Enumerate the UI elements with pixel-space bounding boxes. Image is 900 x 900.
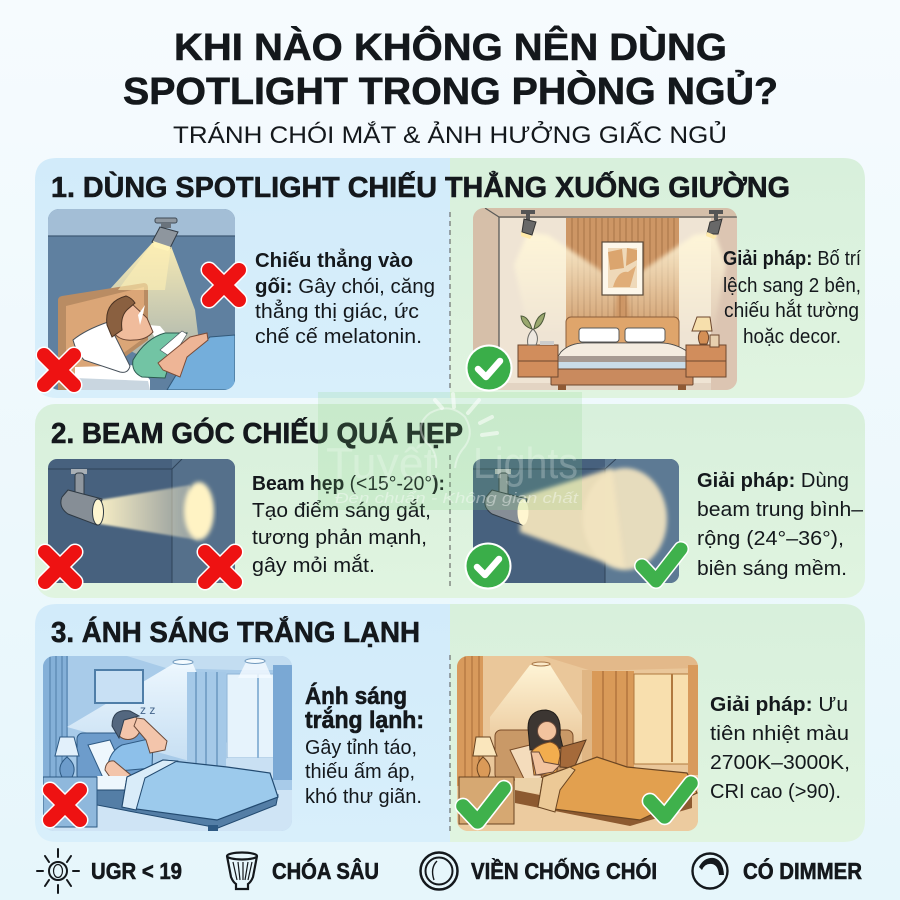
title: [123, 24, 778, 113]
solution text 1: Giải pháp: Bố trí: [723, 248, 861, 270]
watermark: Đèn chuẩn - Không gian chất: [335, 490, 579, 507]
heading 3: 3. ÁNH SÁNG TRẮNG LẠNH: [51, 615, 420, 649]
solution text 1: [723, 248, 861, 348]
illustration: narrow beam: [48, 459, 235, 583]
label: deep reflector: CHÓA SÂU: [272, 857, 379, 884]
problem text 1: chế cế melatonin.: [255, 326, 422, 348]
illustration: wide soft beam: [473, 459, 679, 583]
problem text 2: tương phản mạnh,: [252, 527, 427, 549]
icon: deep reflector: [227, 852, 257, 889]
problem text 3: Ánh sáng: [305, 682, 407, 710]
label: dimmer: CÓ DIMMER: [743, 857, 862, 884]
panel 2: beam too narrow: [35, 404, 865, 598]
panel 1: spotlight straight down: [35, 158, 865, 398]
solution text 1: hoặc decor.: [743, 326, 841, 348]
problem text 3: trắng lạnh:: [305, 706, 424, 734]
heading 1: 1. DÙNG SPOTLIGHT CHIẾU THẲNG XUỐNG GIƯỜNG: [51, 170, 790, 204]
icon: UGR glare sun: [37, 849, 79, 893]
solution text 1: lệch sang 2 bên,: [723, 275, 861, 297]
title: SPOTLIGHT TRONG PHÒNG NGỦ?: [123, 69, 778, 113]
solution text 3: CRI cao (>90).: [710, 781, 841, 803]
panel 3: cold white light: [35, 604, 865, 842]
problem text 2: Tạo điểm sáng gắt,: [252, 499, 431, 522]
red x badge: right: [209, 270, 239, 300]
problem text 3: Gây tỉnh táo,: [305, 737, 417, 759]
solution text 2: [697, 470, 864, 580]
problem text 1: [255, 248, 435, 348]
subtitle: TRÁNH CHÓI MẮT & ẢNH HƯỞNG GIẤC NGỦ: [173, 120, 727, 149]
zzz label: z z: [140, 703, 155, 717]
solution text 3: Giải pháp: Ưu: [710, 694, 848, 716]
problem text 1: gối: Gây chói, căng: [255, 276, 435, 298]
illustration: bedroom with offset spotlights: [473, 208, 737, 390]
problem text 1: Chiếu thẳng vào: [255, 248, 413, 272]
solution text 3: tiên nhiệt màu: [710, 723, 849, 745]
check badge: [466, 344, 512, 392]
solution text 2: biên sáng mềm.: [697, 558, 847, 580]
check marks 3: [463, 783, 691, 822]
red x badge 3: [50, 790, 80, 820]
solution text 2: rộng (24°–36°),: [697, 528, 844, 550]
watermark: Lights: [473, 439, 578, 488]
label: anti-glare ring: VIỀN CHỐNG CHÓI: [471, 857, 657, 884]
icon: anti-glare ring: [420, 852, 458, 890]
problem text 3: khó thư giãn.: [305, 786, 422, 808]
problem text 3: thiếu ấm áp,: [305, 761, 415, 783]
problem text 2: [252, 473, 445, 577]
red x badges: narrow beam: [45, 552, 235, 582]
solution text 2: Giải pháp: Dùng: [697, 470, 849, 492]
illustration: man under spotlight: [48, 209, 235, 390]
red x badge: headboard: [44, 355, 74, 385]
label: UGR: UGR < 19: [91, 858, 182, 884]
solution text 3: [710, 694, 850, 803]
icon: dimmer: [692, 854, 728, 888]
problem text 1: thẳng thị giác, ức: [255, 299, 419, 323]
check mark 2: [642, 549, 681, 581]
check badge 2: [464, 542, 512, 590]
problem text 3: [305, 682, 424, 808]
problem text 2: Beam hẹp (<15°-20°):: [252, 473, 445, 495]
problem text 2: gây mỏi mắt.: [252, 554, 375, 577]
solution text 1: chiếu hắt tường: [724, 299, 859, 322]
solution text 2: beam trung bình–: [697, 499, 864, 521]
watermark: [318, 392, 582, 510]
title: KHI NÀO KHÔNG NÊN DÙNG: [174, 24, 727, 69]
solution text 3: 2700K–3000K,: [710, 752, 850, 774]
watermark: Tuyết: [326, 439, 436, 488]
illustration: cold bedroom: [43, 656, 292, 831]
heading 2: 2. BEAM GÓC CHIẾU QUÁ HẸP: [51, 416, 463, 450]
illustration: warm bedroom: [457, 656, 698, 831]
footer: features: [37, 849, 862, 893]
